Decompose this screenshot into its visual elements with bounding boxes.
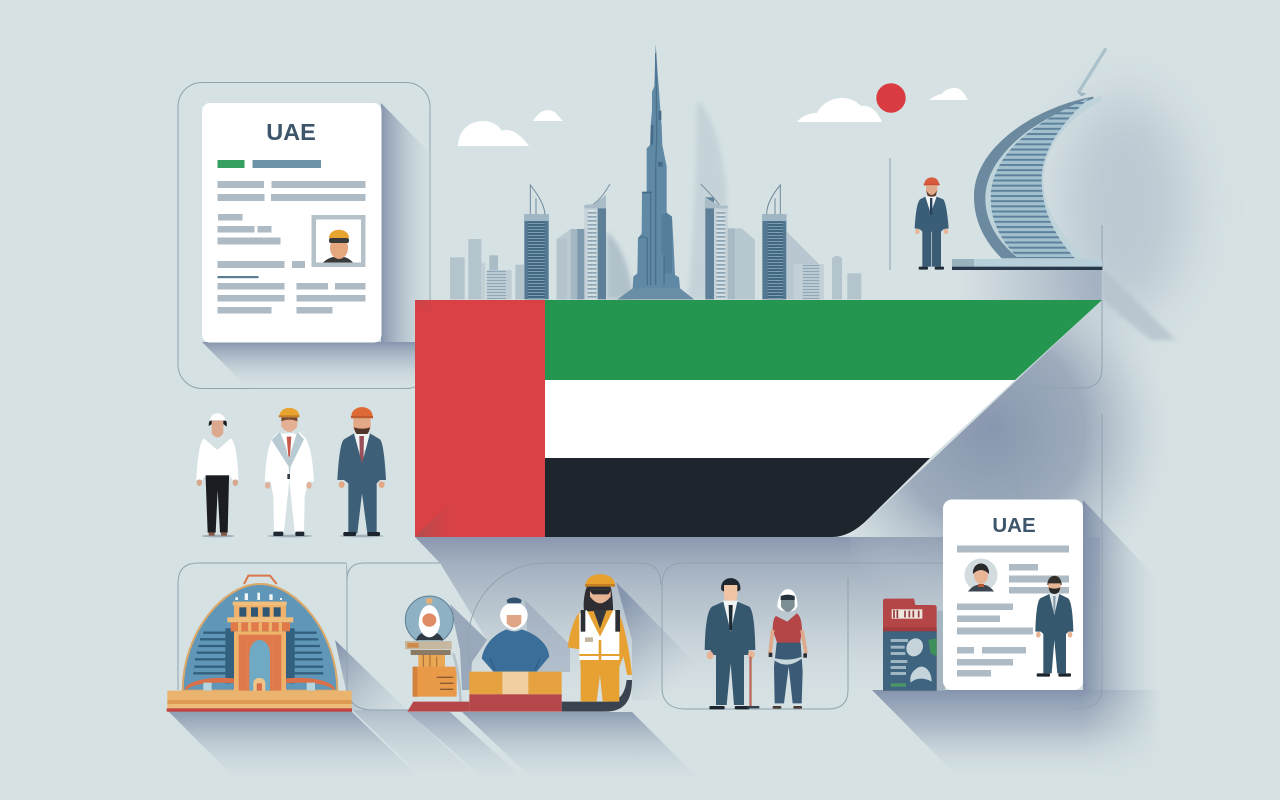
- green band: [545, 300, 1102, 380]
- text lines: [957, 546, 1069, 676]
- white band: [545, 380, 1015, 458]
- round portrait globe: [405, 596, 453, 644]
- heading: UAE: [266, 119, 316, 145]
- Burj Khalifa: [618, 44, 694, 299]
- clouds: [458, 88, 968, 146]
- shadow of lower-right document: [872, 500, 1152, 758]
- outline frames: [178, 82, 1102, 710]
- shadow of top-left document: [202, 103, 440, 392]
- side wings: [185, 628, 335, 691]
- mast: [1078, 48, 1106, 93]
- floor shadows under bottom row: [167, 582, 706, 788]
- bearded man in suit: [1035, 576, 1073, 677]
- finials: [235, 593, 282, 600]
- domed landmark building: [167, 576, 352, 712]
- stripes: [990, 98, 1089, 258]
- base: [952, 259, 1102, 267]
- worker in white shirt: [196, 413, 238, 537]
- flag of the UAE: [415, 300, 1102, 537]
- sail tower hotel: [952, 48, 1106, 270]
- towers: [524, 184, 786, 299]
- text lines: [218, 181, 366, 314]
- black band: [545, 458, 930, 537]
- desk: [469, 672, 562, 712]
- underline accent: [218, 276, 258, 278]
- dome: [183, 584, 337, 691]
- man in suit: [705, 578, 759, 709]
- folder with charts: [883, 599, 945, 691]
- distant buildings: [450, 103, 861, 299]
- light band: [985, 96, 1102, 258]
- suited man and woman: [705, 578, 807, 709]
- skyline with Burj Khalifa: [450, 44, 861, 299]
- worker in red hard hat: [915, 177, 949, 270]
- outer crescent: [974, 97, 1093, 258]
- seated worker in blue sweater: [482, 597, 549, 672]
- standing worker in orange coverall: [562, 574, 632, 712]
- infographic canvas: [166, 44, 1196, 762]
- heading: UAE: [992, 514, 1036, 537]
- photo of person: [312, 215, 366, 267]
- document card: UAE lower right: [943, 500, 1083, 690]
- portrait avatar: [964, 558, 998, 592]
- workers and desk scene: [405, 574, 632, 712]
- base plinth: [167, 691, 352, 712]
- roof handle: [244, 576, 277, 584]
- pedestal: [405, 641, 469, 712]
- sun: [876, 83, 906, 113]
- central tower: [227, 602, 293, 691]
- document card: UAE top left: [202, 103, 382, 342]
- worker in blue suit: [337, 407, 386, 537]
- green and blue header bars: [218, 160, 321, 168]
- soft shadow of sail tower: [955, 95, 1187, 340]
- soft shadows behind flag: [415, 300, 1190, 712]
- red band: [415, 300, 545, 537]
- worker in white coat: [265, 408, 314, 537]
- woman with white headscarf: [769, 589, 807, 709]
- three workers group: [196, 407, 386, 537]
